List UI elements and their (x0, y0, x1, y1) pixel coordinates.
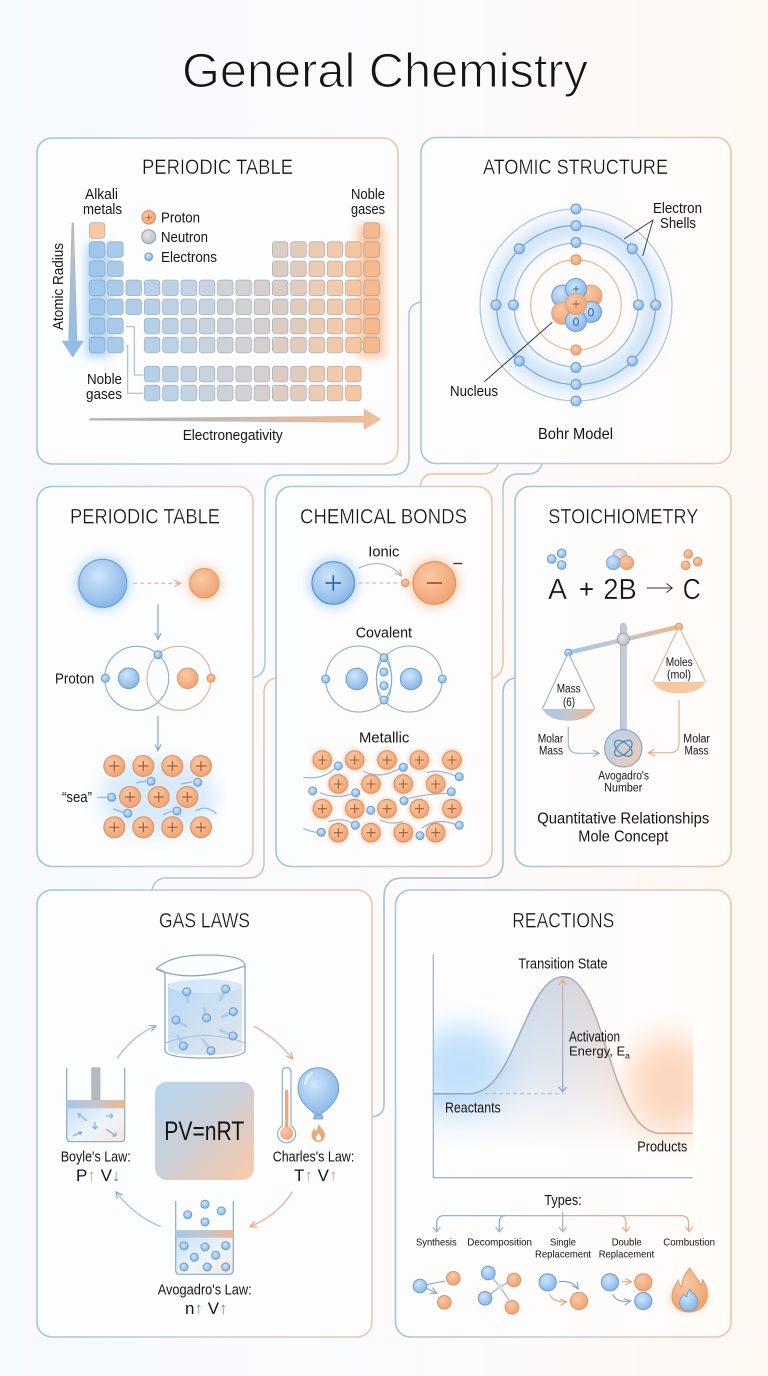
panel: periodic table grid (37, 138, 398, 464)
equation: C (683, 574, 701, 606)
balloon (298, 1068, 339, 1119)
element grid (89, 223, 379, 401)
label: avogadro's law: n↑ V↑ (185, 1299, 228, 1318)
equation: + (579, 574, 594, 604)
label: noble gases top (351, 187, 385, 218)
flame (312, 1124, 325, 1142)
type labels: Single (550, 1237, 576, 1249)
label: avogadro's law: Avogadro's Law: (158, 1282, 252, 1298)
electrons (491, 204, 661, 406)
thermometer (278, 1068, 296, 1143)
label: avogadro's law (158, 1282, 252, 1318)
chart labels: Reactants (445, 1100, 501, 1116)
icon: decomposition (478, 1266, 521, 1314)
balance scale (542, 623, 706, 767)
chart labels: Transition State (518, 956, 608, 972)
heading: GAS LAWS (159, 909, 250, 932)
icon: synthesis (413, 1272, 460, 1309)
label: avogadro's number (598, 770, 649, 795)
chart labels: a (625, 1051, 630, 1061)
label: bohr model: Bohr Model (538, 426, 613, 443)
caption: Mole Concept (578, 829, 669, 846)
heading: CHEMICAL BONDS (300, 505, 467, 528)
legend: Electrons (161, 250, 217, 266)
label: avogadro's number: Number (604, 783, 642, 795)
icon: double replacement (601, 1274, 652, 1310)
heading: periodic table: PERIODIC TABLE (142, 156, 293, 179)
panel: atomic structure (421, 138, 731, 464)
label: alkali metals: Alkali (85, 187, 118, 203)
beaker (156, 955, 245, 1058)
label: proton: Proton (55, 671, 94, 687)
legend (142, 210, 217, 266)
arrow: electronegativity (89, 409, 381, 429)
label: boyle's law: P↑ V↓ (76, 1166, 120, 1185)
electron shells (480, 209, 672, 401)
type arrowheads (433, 1227, 693, 1232)
molar mass arrow left (538, 727, 599, 758)
equation: 2B (603, 574, 637, 606)
panel: stoichiometry (515, 486, 731, 866)
glow: table edges (86, 225, 384, 357)
left pan: mass: (6) (563, 697, 575, 709)
label: metallic: Metallic (359, 731, 409, 747)
chart labels: Activation (569, 1030, 620, 1046)
panel: periodic trends (37, 486, 253, 866)
connectors between panels (152, 302, 542, 1117)
formula box: PV=nRT (164, 1116, 244, 1146)
caption (537, 810, 709, 846)
equation (548, 574, 701, 606)
label: charles's law: Charles's Law: (273, 1150, 354, 1166)
label: nucleus with leader (450, 322, 552, 400)
chart labels (445, 956, 687, 1156)
label: electron shells with leaders (624, 201, 702, 256)
right pan: moles (653, 627, 706, 693)
label: avogadro's number: Avogadro's (598, 770, 649, 782)
energy diagram (432, 954, 693, 1178)
label: nucleus with leader: Nucleus (450, 384, 498, 400)
label: alkali metals: metals (83, 202, 122, 218)
lanthanide brackets (126, 327, 143, 393)
type labels: Double (612, 1237, 642, 1249)
arrow: down (157, 604, 159, 639)
label: charles's law: T↑ V↑ (294, 1166, 337, 1185)
type labels: Replacement (599, 1249, 654, 1261)
type labels: Replacement (535, 1249, 591, 1261)
types bracket (437, 1212, 688, 1231)
heading: PERIODIC TABLE (70, 505, 220, 528)
nucleus (552, 278, 602, 332)
type labels: Synthesis (416, 1237, 457, 1249)
left pan: mass (542, 653, 595, 721)
arrow: down (157, 716, 159, 751)
label: boyle's law: Boyle's Law: (61, 1150, 131, 1166)
label: types: Types: (544, 1192, 582, 1209)
label: electronegativity: Electronegativity (183, 428, 283, 444)
label: noble gases bottom: gases (86, 387, 122, 403)
icon: combustion flame (669, 1268, 709, 1313)
label: noble gases bottom: Noble (87, 372, 122, 388)
icon: single replacement (539, 1274, 588, 1310)
label: alkali metals (83, 187, 122, 218)
label: electron shells with leaders: Electron (653, 201, 702, 217)
molar mass arrow left: Mass (539, 746, 563, 758)
label: charles's law (273, 1150, 354, 1185)
label: ionic: Ionic (368, 545, 399, 561)
arrow: atomic radius (62, 223, 83, 357)
avogadro's law container (176, 1200, 233, 1274)
caption: Quantitative Relationships (537, 810, 709, 827)
overlapping atoms (101, 646, 215, 710)
heading: STOICHIOMETRY (548, 505, 698, 528)
type labels: Decomposition (467, 1237, 532, 1249)
molar mass arrow right: Molar (683, 734, 710, 746)
diagram: ionic bond (308, 558, 462, 608)
heading: REACTIONS (512, 909, 614, 932)
right pan: moles: (mol) (667, 669, 691, 681)
label: noble gases top: Noble (351, 187, 385, 203)
type labels: Combustion (663, 1237, 715, 1249)
panel: gas laws (37, 890, 372, 1337)
label: noble gases top: gases (351, 202, 385, 218)
molecule icons (547, 549, 702, 570)
equation: A (548, 574, 568, 606)
left pan: mass: Mass (557, 684, 581, 696)
nucleus: 0 (573, 315, 580, 329)
label: atomic radius: Atomic Radius (51, 243, 67, 330)
label: sea: “sea” (62, 790, 92, 806)
chart labels: Energy, E (569, 1044, 625, 1059)
label: covalent: Covalent (356, 626, 412, 642)
panel: chemical bonds (276, 486, 492, 866)
legend: Proton (161, 211, 200, 227)
label: electron shells with leaders: Shells (660, 216, 696, 232)
right pan: moles: Moles (666, 657, 693, 669)
type labels (416, 1237, 715, 1261)
label: boyle's law (61, 1150, 131, 1185)
molar mass arrow right: Mass (684, 746, 709, 758)
atoms: size comparison (76, 556, 221, 610)
title: General Chemistry (182, 45, 588, 98)
boyle's law piston (67, 1068, 125, 1142)
panel: reactions (396, 890, 731, 1337)
glow ring (499, 228, 653, 382)
formula box (155, 1082, 254, 1180)
heading: atomic structure: ATOMIC STRUCTURE (483, 156, 668, 179)
metallic sea (100, 756, 217, 838)
nucleus: 0 (588, 306, 595, 320)
diagram: metallic bond (303, 750, 463, 843)
molar mass arrow left: Molar (538, 734, 563, 746)
diagram: covalent bond (322, 646, 446, 712)
label: noble gases bottom (86, 372, 122, 403)
molar mass arrow right (648, 700, 710, 758)
legend: Neutron (161, 230, 208, 246)
chart labels: Products (637, 1140, 687, 1156)
cycle arrows (116, 1026, 293, 1227)
avogadro ball (605, 730, 642, 767)
